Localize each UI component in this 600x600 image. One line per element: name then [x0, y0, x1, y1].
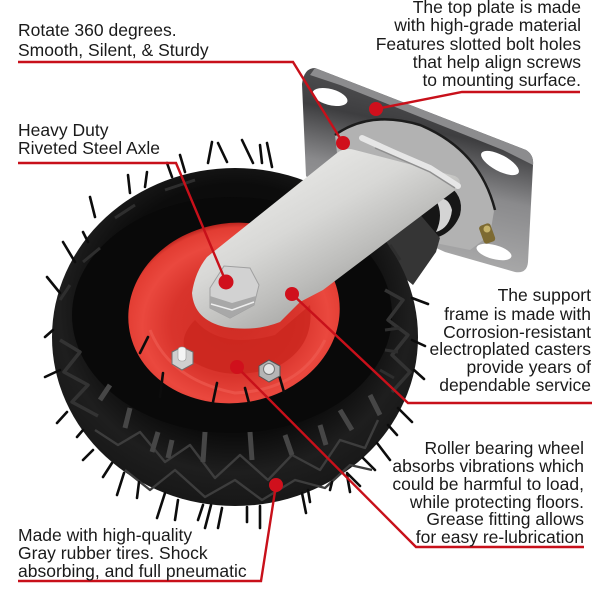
text: top plate: [376, 0, 581, 90]
text: swivel rotation: [18, 20, 209, 60]
text: support frame: frame is made with: [444, 304, 591, 324]
text: roller bearing: Grease fitting allows: [426, 509, 584, 529]
text: support frame: dependable service: [439, 375, 591, 395]
icon: axle hex bolt: [210, 266, 259, 318]
tire tread pattern: [60, 180, 410, 500]
text: rubber tire: Gray rubber tires. Shock: [18, 543, 208, 563]
icon: rim bolts: [172, 347, 280, 382]
callout: axle leader: [18, 163, 234, 290]
icon: pneumatic rubber tire: [45, 140, 428, 528]
text: rubber tire: absorbing, and full pneumatic: [18, 561, 247, 581]
rim spikes: [140, 337, 284, 403]
text: roller bearing: absorbs vibrations which: [392, 456, 584, 476]
text: roller bearing: [392, 438, 584, 547]
text: top plate: Features slotted bolt holes: [376, 34, 581, 54]
text: top plate: to mounting surface.: [422, 70, 581, 90]
callout: top plate leader: [369, 92, 580, 116]
text: axle: Heavy Duty: [18, 120, 109, 140]
text: top plate: that help align screws: [413, 52, 581, 72]
text: rubber tire: [18, 525, 247, 581]
bearing housing: [400, 183, 461, 240]
text: support frame: provide years of: [466, 357, 591, 377]
icon: red wheel rim: [117, 209, 351, 417]
text: swivel rotation: Rotate 360 degrees.: [18, 20, 177, 40]
icon: grease fitting: [478, 222, 496, 244]
text: axle: Riveted Steel Axle: [18, 138, 160, 158]
text: swivel rotation: Smooth, Silent, & Sturdy: [18, 40, 209, 60]
text: roller bearing: while protecting floors.: [409, 492, 584, 512]
text: rubber tire: Made with high-quality: [18, 525, 192, 545]
callout: support frame leader: [285, 287, 592, 403]
text: support frame: The support: [498, 285, 591, 305]
text: axle: [18, 120, 160, 158]
text: support frame: Corrosion-resistant: [443, 322, 591, 342]
tire spikes: [45, 140, 428, 528]
icon: support frame arm: [192, 138, 460, 329]
text: roller bearing: Roller bearing wheel: [424, 438, 584, 458]
callout: roller bearing leader: [230, 360, 584, 547]
icon: mounting top plate: [302, 68, 533, 285]
text: roller bearing: could be harmful to load,: [392, 474, 584, 494]
text: top plate: with high-grade material: [393, 15, 581, 35]
text: roller bearing: for easy re-lubrication: [416, 527, 584, 547]
text: support frame: electroplated casters: [430, 339, 591, 359]
text: support frame: [430, 285, 591, 395]
callout: rubber tire leader: [18, 478, 283, 581]
weld seam: [362, 138, 458, 186]
callout: swivel rotation leader: [18, 62, 350, 150]
mounting disc: [335, 119, 495, 250]
icon: slotted bolt holes: [311, 85, 522, 263]
